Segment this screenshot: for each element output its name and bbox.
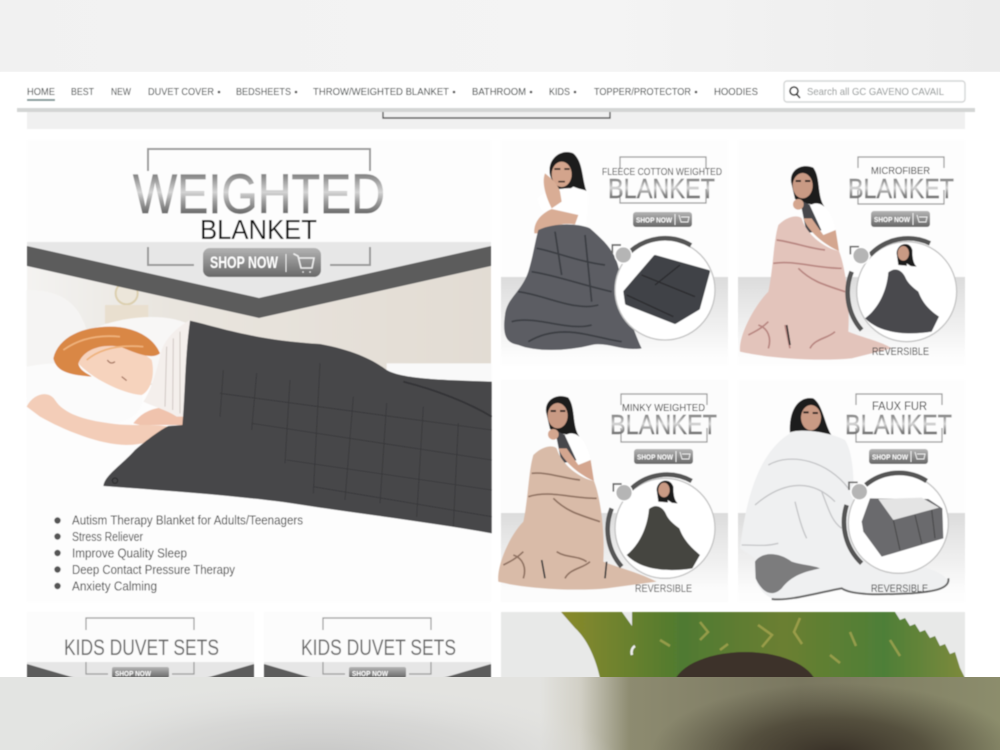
frame [620,157,706,203]
heading: KIDS DUVET SETS [64,635,219,660]
navigation bar: NEW [111,87,131,98]
benefits list: Deep Contact Pressure Therapy [72,562,235,577]
shop now button [869,449,928,464]
navigation bar: BATHROOM [472,87,526,98]
benefits list: Anxiety Calming [72,578,157,594]
panel: kids duvet sets left [27,612,254,678]
panel: fleece cotton weighted blanket [501,140,728,365]
panel: weighted blanket hero [27,140,492,602]
reversible label: REVERSIBLE [871,583,928,595]
shop now button [634,449,693,464]
frame [621,394,707,442]
benefits list: Autism Therapy Blanket for Adults/Teenagers [72,512,303,528]
shop now button: SHOP NOW [636,216,673,224]
benefits list: Improve Quality Sleep [72,546,187,560]
navigation bar: HOME [27,87,55,98]
hair of figure [673,652,817,724]
inset circle with reversible side [608,475,715,578]
photo: woman sleeping under blanket [27,282,492,602]
headline: blanket: BLANKET [200,214,317,245]
model in white fur blanket [740,398,948,599]
shop now button: SHOP NOW [872,452,909,462]
navigation bar: KIDS [549,87,570,98]
shop now button: SHOP NOW [637,452,674,462]
headline: weighted: WEIGHTED [133,162,385,225]
arms [27,394,168,445]
navigation bar: BEDSHEETS [236,87,291,98]
title frame [148,149,370,265]
panel: faux fur blanket [738,380,965,602]
subtitle: MINKY WEIGHTED [622,402,705,414]
model with pink blanket [740,166,957,360]
shop now button [112,667,169,678]
shop now button: SHOP NOW [115,671,151,678]
reversible label: REVERSIBLE [635,583,692,595]
subtitle: FLEECE COTTON WEIGHTED [602,166,722,178]
subtitle: FAUX FUR [872,401,927,413]
hair [53,327,160,377]
top blurred band [0,0,1000,72]
navigation bar: HOODIES [714,87,758,98]
pillow [27,363,142,423]
dark blanket [103,321,492,533]
shop now button [349,667,406,678]
shirt [143,320,190,417]
search box [784,81,965,102]
model with tan blanket [498,396,657,590]
navigation bar: DUVET COVER [148,87,214,98]
shop now button [202,247,322,278]
shop now button: SHOP NOW [210,253,279,272]
shop now button: SHOP NOW [352,671,388,678]
panel: minky weighted blanket [498,380,728,602]
heading: KIDS DUVET SETS [301,635,456,660]
shop now button: SHOP NOW [874,215,911,224]
model with grey blanket [504,152,715,350]
product name: BLANKET [610,409,717,440]
product name: BLANKET [848,173,954,204]
navigation bar: THROW/WEIGHTED BLANKET [313,87,449,98]
navigation bar [0,72,1000,129]
product name: BLANKET [845,409,952,440]
reversible label: REVERSIBLE [872,346,929,358]
panel: microfiber blanket [738,140,965,365]
grey chevron [27,246,491,318]
panel: green patterned product photo [501,612,965,724]
benefits list: Stress Reliever [72,529,144,544]
shop now button [871,211,930,227]
frame [858,157,944,204]
bottom blurred band [0,677,1000,750]
benefits list [54,512,303,594]
product name: BLANKET [608,173,715,204]
search box: Search all GC GAVENO CAVAIL [807,86,944,98]
face [77,344,153,395]
navigation bar: TOPPER/PROTECTOR [594,87,691,98]
frame [856,394,942,442]
panel: kids duvet sets right [264,612,491,678]
shop now button [633,212,692,227]
navigation bar: BEST [71,87,94,98]
subtitle: MICROFIBER [871,165,930,177]
